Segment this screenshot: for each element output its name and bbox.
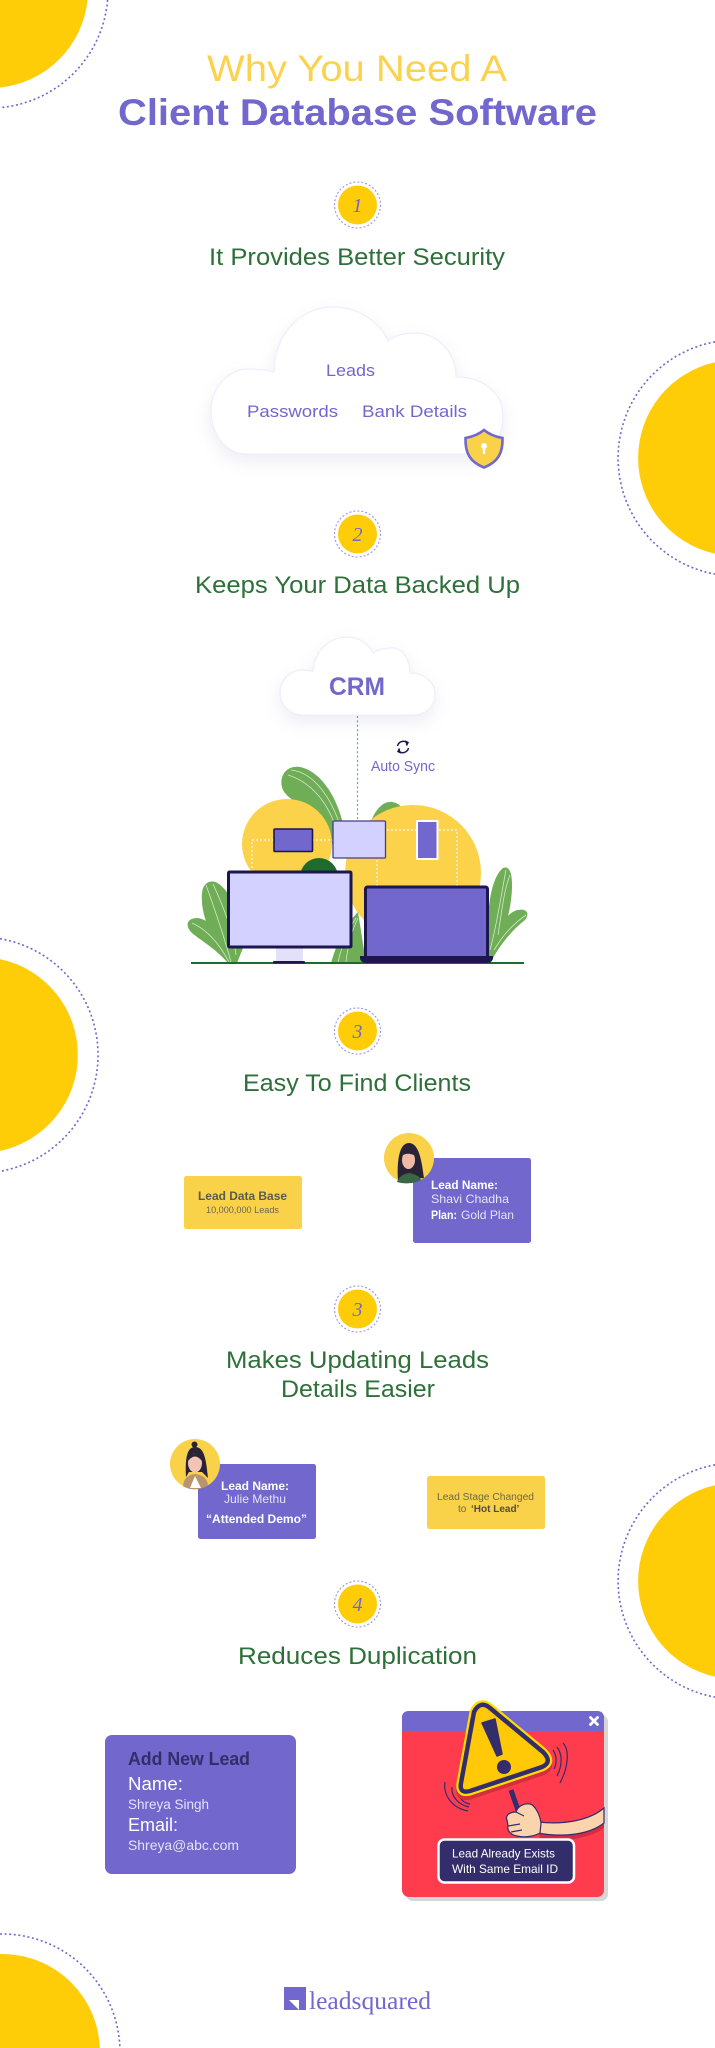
number badge 2: 2 bbox=[352, 524, 362, 546]
ground line bbox=[191, 962, 524, 964]
decorative circle: right lower bbox=[618, 1465, 715, 1697]
heading: updating leads: Makes Updating Leads bbox=[226, 1347, 489, 1374]
purple card: Shavi Chadha: Gold Plan bbox=[461, 1208, 514, 1222]
security cloud: Bank Details bbox=[362, 402, 467, 421]
form card: add new lead: Add New Lead bbox=[128, 1748, 250, 1769]
dark green mound bbox=[300, 858, 338, 896]
form card: add new lead: Shreya Singh bbox=[128, 1796, 209, 1812]
plant: behind right blob bbox=[369, 802, 402, 835]
plant: top leaf bbox=[281, 767, 346, 845]
security cloud bbox=[211, 307, 503, 468]
logo: leadsquared: leadsquared bbox=[309, 1988, 432, 2015]
heading: easy to find clients: Easy To Find Clients bbox=[243, 1070, 471, 1097]
close icon bbox=[590, 1718, 598, 1724]
vibration arcs bbox=[445, 1743, 567, 1811]
plant: left bbox=[188, 881, 243, 963]
heading: updating leads bbox=[226, 1347, 489, 1403]
CRM cloud bbox=[280, 637, 435, 715]
heading: data backed up: Keeps Your Data Backed Up bbox=[195, 572, 520, 599]
desktop monitor bbox=[228, 872, 351, 964]
phone bbox=[417, 821, 438, 859]
device and plant illustration bbox=[188, 767, 527, 964]
yellow card: lead stage: Lead Stage Changed bbox=[437, 1492, 534, 1503]
security cloud: Leads bbox=[326, 361, 375, 380]
number badge 3 bbox=[334, 1008, 380, 1054]
alert message box: With Same Email ID bbox=[452, 1862, 558, 1876]
small tablet bbox=[274, 829, 312, 852]
form card: add new lead: Email: bbox=[128, 1814, 178, 1835]
purple card: Julie Methu: “Attended Demo” bbox=[206, 1512, 307, 1526]
purple card: Shavi Chadha: Lead Name: bbox=[431, 1178, 498, 1192]
number badge 1: 1 bbox=[352, 195, 362, 217]
alert message box: Lead Already Exists bbox=[452, 1846, 555, 1860]
white dashed connectors bbox=[252, 830, 457, 930]
decorative circle: bottom left bbox=[0, 1934, 120, 2048]
purple card: Julie Methu bbox=[198, 1464, 316, 1539]
purple card: Shavi Chadha bbox=[413, 1158, 531, 1243]
decorative circle: top left bbox=[0, 0, 108, 108]
heading: better security: It Provides Better Security bbox=[209, 244, 505, 271]
warning triangle bbox=[461, 1705, 548, 1796]
icon: sync bbox=[398, 741, 408, 753]
purple card: Julie Methu: Lead Name: bbox=[221, 1479, 289, 1493]
hand and arm bbox=[507, 1804, 604, 1840]
number badge 1 bbox=[334, 182, 380, 228]
floating screen bbox=[333, 821, 386, 858]
warning sign post bbox=[511, 1790, 527, 1836]
plant: right bbox=[487, 868, 527, 960]
laptop bbox=[360, 887, 493, 963]
yellow card: lead stage: to bbox=[458, 1504, 467, 1515]
title bbox=[118, 48, 597, 133]
avatar: Julie bbox=[170, 1439, 220, 1489]
icon: shield with keyhole bbox=[465, 430, 503, 468]
duplicate alert popup bbox=[402, 1705, 608, 1901]
title: Why You Need A bbox=[207, 48, 507, 89]
decorative circle: right upper bbox=[618, 342, 715, 574]
form card: add new lead bbox=[105, 1735, 296, 1874]
number badge 3 (second) bbox=[334, 1286, 380, 1332]
number badge 3: 3 bbox=[352, 1021, 362, 1043]
dashed sync line bbox=[356, 716, 358, 821]
yellow card: lead database bbox=[184, 1176, 302, 1229]
form card: add new lead: Shreya@abc.com bbox=[128, 1837, 239, 1853]
yellow card: lead stage: ‘Hot Lead’ bbox=[471, 1504, 520, 1515]
avatar: Shavi bbox=[384, 1133, 434, 1183]
number badge 2 bbox=[334, 511, 380, 557]
yellow card: lead database: 10,000,000 Leads bbox=[206, 1205, 279, 1216]
yellow card: lead database: Lead Data Base bbox=[198, 1191, 287, 1203]
alert message box bbox=[438, 1840, 574, 1882]
form card: add new lead: Name: bbox=[128, 1773, 183, 1794]
yellow card: lead stage bbox=[427, 1476, 545, 1529]
purple card: Shavi Chadha: Plan: bbox=[431, 1208, 457, 1222]
purple card: Julie Methu: Julie Methu bbox=[224, 1492, 286, 1506]
security cloud: Passwords bbox=[247, 402, 338, 421]
plant: middle bbox=[331, 912, 366, 963]
number badge 3 (second): 3 bbox=[352, 1299, 362, 1321]
decorative circle: left middle bbox=[0, 939, 98, 1171]
yellow blobs bbox=[242, 799, 481, 941]
purple card: Shavi Chadha: Shavi Chadha bbox=[431, 1192, 509, 1206]
heading: reduces duplication: Reduces Duplication bbox=[238, 1643, 477, 1670]
auto sync label: Auto Sync bbox=[371, 758, 435, 775]
heading: updating leads: Details Easier bbox=[281, 1376, 435, 1403]
popup header bbox=[402, 1711, 604, 1731]
number badge 4 bbox=[334, 1581, 380, 1627]
title: Client Database Software bbox=[118, 92, 597, 133]
number badge 4: 4 bbox=[352, 1594, 362, 1616]
CRM cloud: CRM bbox=[329, 673, 385, 701]
